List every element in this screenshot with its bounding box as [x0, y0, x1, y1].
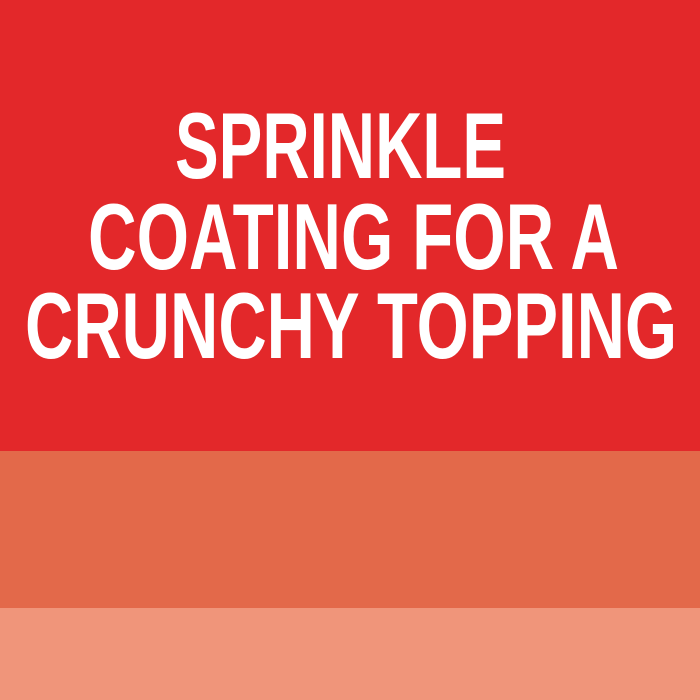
panel: red title background: [0, 0, 700, 451]
title: [25, 93, 677, 378]
title line 1: SPRINKLE: [175, 93, 506, 198]
panel: bottom light band: [0, 608, 700, 700]
panel: middle orange band: [0, 451, 700, 608]
